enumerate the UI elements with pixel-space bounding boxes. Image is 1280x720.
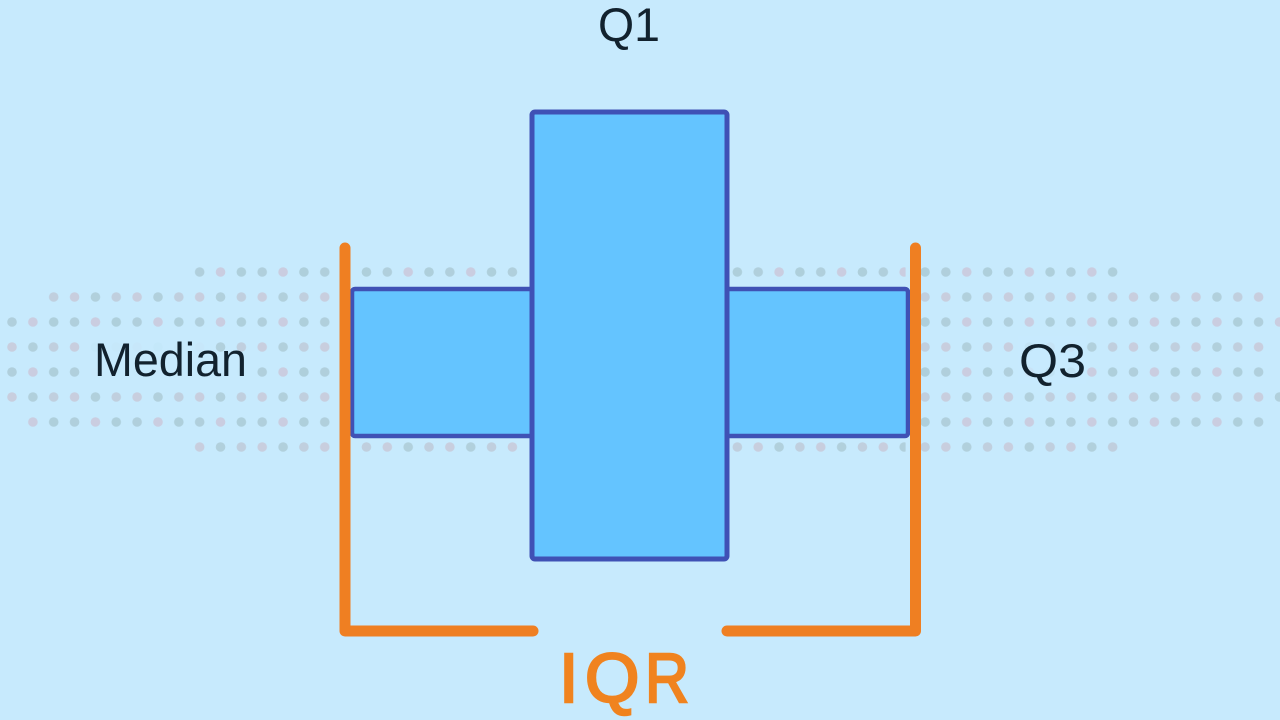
label: Median: Median xyxy=(94,333,247,386)
bracket: left xyxy=(345,248,533,631)
label: Q3: Q3 xyxy=(1019,334,1086,387)
label: IQR: R xyxy=(645,639,689,717)
box: right section xyxy=(725,289,908,436)
bracket: right xyxy=(727,248,916,631)
dot fade behind Median lower row xyxy=(84,360,252,384)
dot fade behind Q3 xyxy=(1018,336,1086,384)
box: central section xyxy=(532,112,727,559)
label: IQR: IQ xyxy=(559,639,639,717)
dot fade behind Median xyxy=(84,336,210,360)
dotted background band xyxy=(0,260,1280,460)
box: left section xyxy=(352,289,534,436)
